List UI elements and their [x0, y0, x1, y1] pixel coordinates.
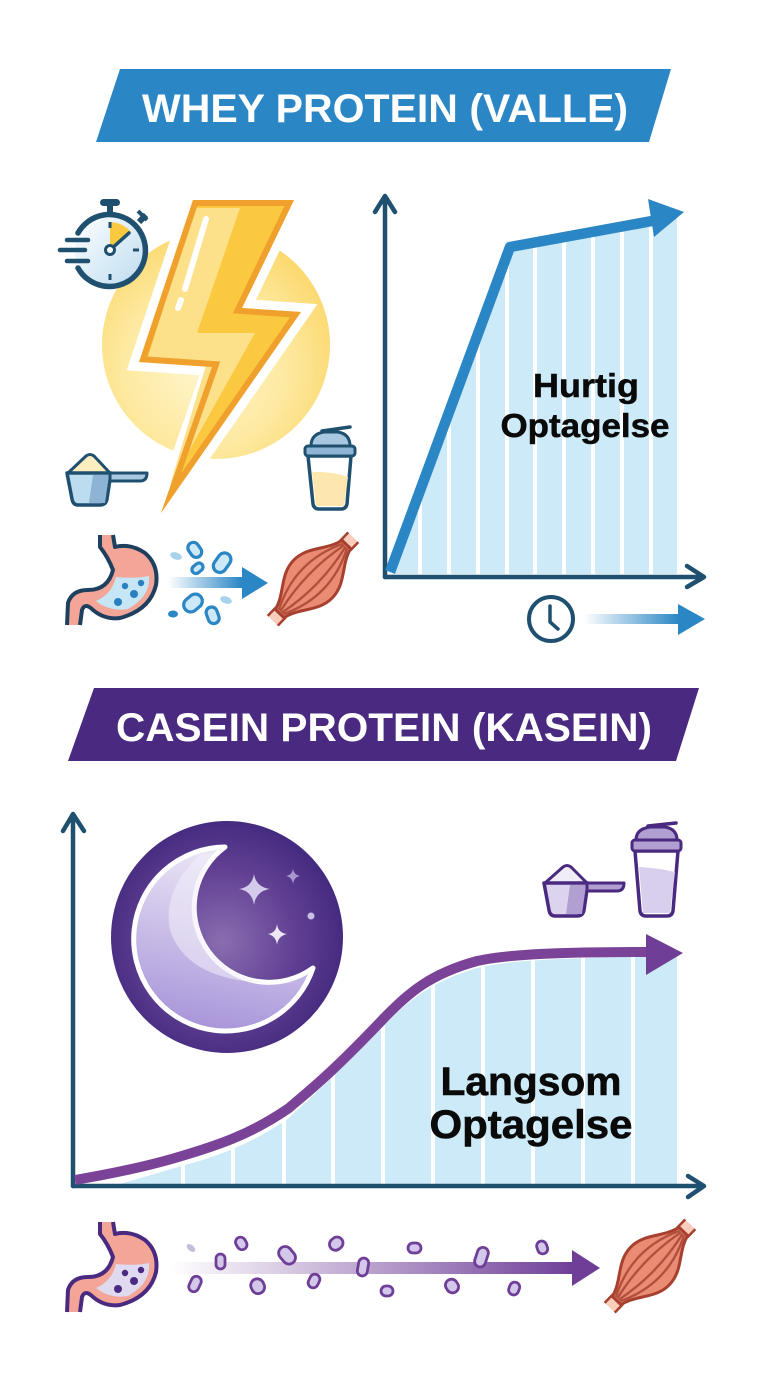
- icon: whey stomach: [67, 535, 157, 625]
- icon: casein shaker: [632, 823, 681, 916]
- icon: stopwatch: [60, 199, 147, 286]
- chart area fill: [120, 956, 677, 1184]
- icon: clock: [529, 597, 573, 641]
- arrow: casein stomach to muscle: [170, 1250, 600, 1286]
- chart: whey absorption curve: [375, 196, 704, 587]
- y and x axes: [375, 196, 704, 587]
- icon: moon in night circle: [111, 821, 343, 1053]
- chart: casein absorption curve: [63, 814, 704, 1197]
- icon: casein muscle: [590, 1206, 710, 1326]
- chart area fill: [392, 212, 677, 577]
- casein particles: [185, 1235, 549, 1296]
- title: casein protein: CASEIN PROTEIN (KASEIN): [116, 706, 652, 750]
- whey particles: [168, 540, 233, 625]
- banner: casein protein: [68, 688, 699, 761]
- icon: casein stomach: [67, 1222, 157, 1312]
- y and x axes: [63, 814, 704, 1197]
- icon: whey scoop: [67, 454, 147, 505]
- label: langsom optagelse: Langsom: [440, 1060, 622, 1104]
- icon: whey shaker: [305, 427, 355, 509]
- banner: whey protein: [96, 69, 671, 142]
- label: langsom optagelse: Optagelse: [430, 1103, 632, 1147]
- icon: whey muscle: [253, 519, 373, 639]
- icon: sun circle: [102, 231, 330, 459]
- icon: casein scoop: [544, 866, 624, 916]
- arrow: whey stomach to muscle: [168, 567, 268, 599]
- arrow: time: [584, 604, 705, 635]
- icon: lightning bolt: [139, 200, 301, 513]
- s-curve with arrow: [75, 934, 683, 1180]
- rising curve with arrow: [390, 199, 684, 572]
- title: whey protein: WHEY PROTEIN (VALLE): [142, 87, 628, 131]
- label: hurtig optagelse: Optagelse: [500, 407, 670, 444]
- label: hurtig optagelse: Hurtig: [533, 367, 639, 404]
